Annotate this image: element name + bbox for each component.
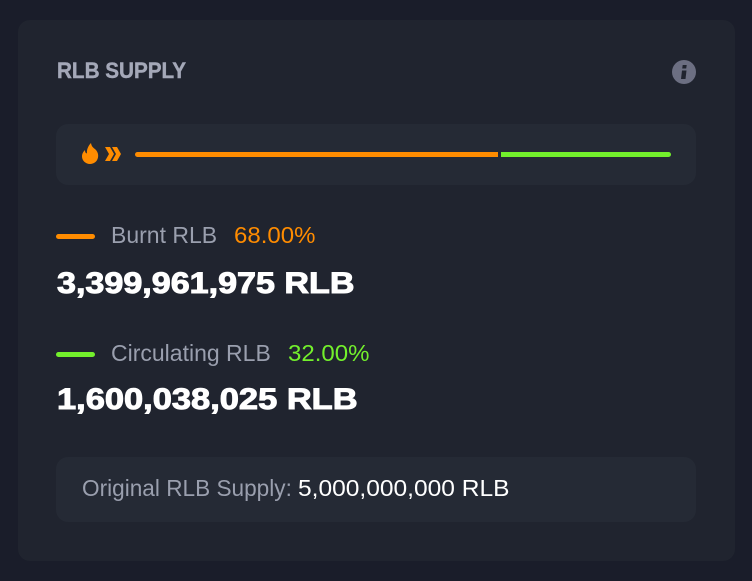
bar: circulating segment [501, 152, 671, 157]
bar: burnt segment [135, 152, 498, 157]
value: original supply: 5,000,000,000 RLB [298, 475, 509, 501]
label: Circulating RLB: Circulating RLB [111, 340, 271, 366]
icon: info [672, 60, 696, 84]
label: Burnt RLB: Burnt RLB [111, 222, 217, 248]
legend swatch: burnt [56, 234, 95, 239]
value: burnt amount: 3,399,961,975 RLB [57, 267, 354, 300]
panel: progress bar container [56, 124, 696, 185]
icon: flame with chevrons [82, 143, 121, 164]
value: burnt percent: 68.00% [234, 222, 315, 248]
heading: RLB SUPPLY: RLB SUPPLY [57, 58, 186, 83]
panel: original supply [56, 457, 696, 522]
legend swatch: circulating [56, 352, 95, 357]
label: original supply: Original RLB Supply: [82, 475, 292, 501]
value: circulating percent: 32.00% [288, 340, 369, 366]
value: circulating amount: 1,600,038,025 RLB [57, 383, 358, 416]
